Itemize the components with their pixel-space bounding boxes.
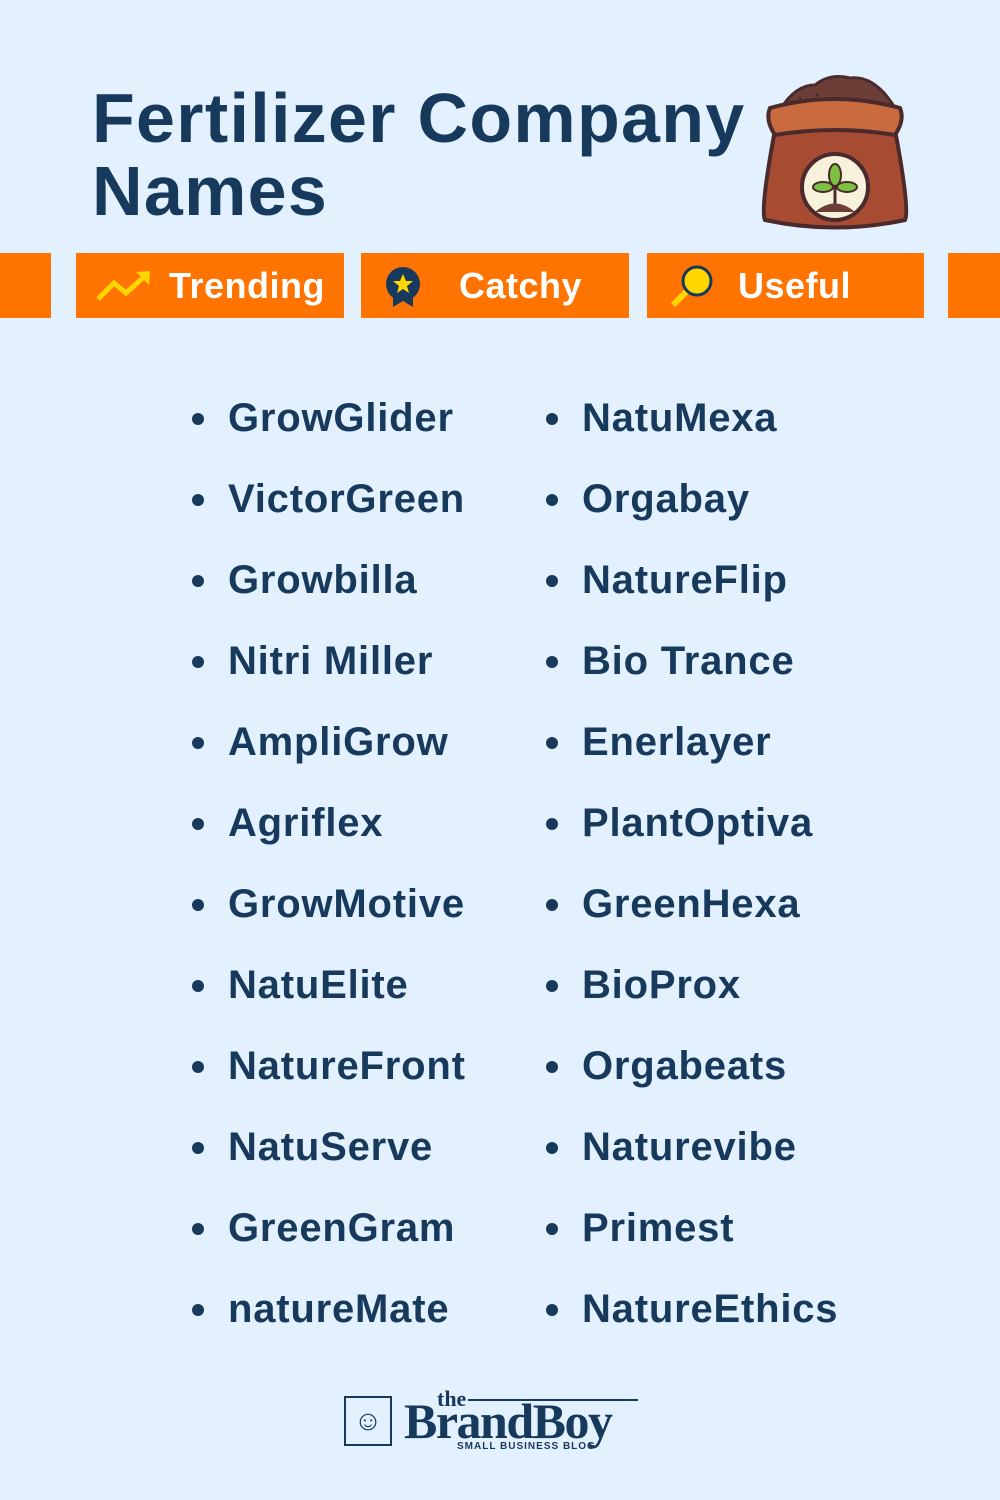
logo: theBrandBoy: BrandBoy [404, 1393, 612, 1449]
list: left column: GrowMotive [228, 882, 465, 926]
tab: Trending: Trending [169, 265, 325, 306]
logo: theBrandBoy: ☺ [354, 1405, 382, 1436]
tab: Trending [76, 253, 344, 318]
logo: theBrandBoy [344, 1386, 638, 1452]
list: left column: VictorGreen [228, 477, 465, 521]
list: right column: PlantOptiva [582, 801, 813, 845]
list: right column: Enerlayer [582, 720, 772, 764]
list: left column: GreenGram [228, 1206, 455, 1250]
title: Names [92, 152, 328, 230]
list: right column: Bio Trance [582, 639, 795, 683]
list: left column: GrowGlider [228, 396, 454, 440]
list: left column: NatureFront [228, 1044, 466, 1088]
list: right column: Orgabay [582, 477, 750, 521]
list: right column: NatureEthics [582, 1287, 838, 1331]
decorative orange edge right [948, 253, 1000, 318]
list: right column: Primest [582, 1206, 734, 1250]
list: right column: Naturevibe [582, 1125, 797, 1169]
tab: Useful [647, 253, 924, 318]
icon: fertilizer bag [762, 75, 908, 230]
decorative orange edge left [0, 253, 51, 318]
list: right column: BioProx [582, 963, 741, 1007]
tab: Catchy [361, 253, 629, 318]
list: left column: Growbilla [228, 558, 417, 602]
title [92, 79, 746, 230]
title: Fertilizer Company [92, 79, 746, 157]
list: left column [192, 396, 466, 1331]
list: left column: Nitri Miller [228, 639, 433, 683]
list: left column: AmpliGrow [228, 720, 449, 764]
tab: Useful: Useful [738, 265, 851, 306]
list: left column: NatuElite [228, 963, 409, 1007]
list: left column: Agriflex [228, 801, 383, 845]
list: left column: natureMate [228, 1287, 449, 1331]
list: left column: NatuServe [228, 1125, 433, 1169]
list: right column [546, 396, 838, 1331]
logo: theBrandBoy: the [437, 1386, 466, 1411]
list: right column: NatuMexa [582, 396, 777, 440]
list: right column: NatureFlip [582, 558, 788, 602]
list: right column: GreenHexa [582, 882, 800, 926]
list: right column: Orgabeats [582, 1044, 787, 1088]
logo: theBrandBoy: SMALL BUSINESS BLOG [457, 1441, 596, 1452]
tab: Catchy: Catchy [459, 265, 582, 306]
